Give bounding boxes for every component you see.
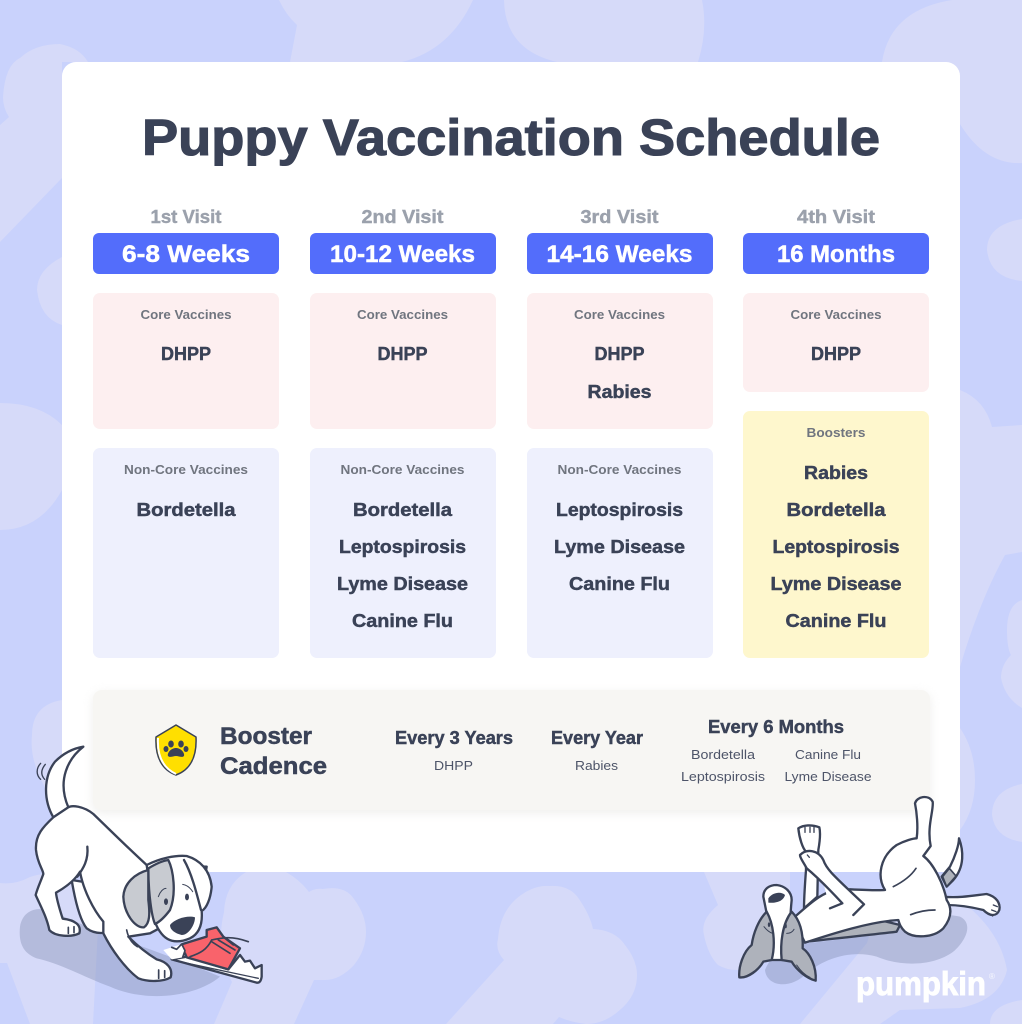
panel: boosters: Lyme Disease	[770, 574, 902, 594]
column: 4th visit: 4th Visit	[797, 207, 875, 227]
panel: core vaccines 2: Core Vaccines	[357, 307, 448, 322]
logo: pumpkin: pumpkin	[856, 965, 986, 1002]
body	[36, 806, 207, 981]
panel: core vaccines 1	[93, 293, 279, 429]
illustration: puppy rolling on back	[739, 797, 1000, 984]
panel: core vaccines 3: Core Vaccines	[574, 307, 665, 322]
panel: core vaccines 3: DHPP	[594, 344, 644, 364]
column: 1st visit: 6-8 Weeks	[122, 241, 250, 268]
head	[763, 885, 792, 960]
panel: non-core vaccines 2: Bordetella	[353, 500, 453, 520]
column: 3rd visit: 3rd Visit	[580, 207, 659, 227]
cadence: every 6 months: Leptospirosis	[681, 769, 766, 784]
tail	[46, 747, 83, 817]
panel: boosters: Canine Flu	[786, 611, 886, 631]
panel: core vaccines 3: Rabies	[588, 382, 652, 402]
panel: non-core vaccines 3	[527, 448, 713, 658]
heading: booster cadence: Booster	[220, 723, 312, 750]
panel: non-core vaccines 1: Bordetella	[136, 500, 237, 520]
panel: core vaccines 2: DHPP	[378, 344, 428, 364]
title: Puppy Vaccination Schedule	[142, 109, 880, 166]
panel: non-core vaccines 1	[93, 448, 279, 658]
cadence: every year: Every Year	[551, 728, 643, 748]
hind leg right	[943, 894, 1000, 915]
lower belly grey	[807, 919, 900, 942]
cadence: every 6 months: Every 6 Months	[708, 717, 844, 737]
panel: boosters: Leptospirosis	[772, 537, 900, 557]
cadence: every year	[551, 728, 643, 773]
panel: boosters	[743, 411, 929, 658]
nose	[170, 917, 195, 935]
panel: non-core vaccines 1: Non-Core Vaccines	[124, 462, 248, 477]
column: 2nd visit: 2nd Visit	[362, 207, 444, 227]
panel: non-core vaccines 2: Canine Flu	[352, 611, 453, 631]
panel: core vaccines 4: DHPP	[811, 344, 861, 364]
tail	[942, 838, 962, 887]
panel: core vaccines 4: Core Vaccines	[790, 307, 882, 322]
shoe	[163, 927, 262, 983]
far front leg	[798, 825, 820, 908]
icon: shield with paw	[156, 725, 196, 775]
hind leg back	[72, 880, 113, 933]
column: 2nd visit: 10-12 Weeks	[330, 241, 475, 268]
cadence: every 6 months: Canine Flu	[795, 747, 861, 762]
heading: booster cadence: Cadence	[220, 753, 327, 780]
panel: non-core vaccines 3: Lyme Disease	[554, 537, 685, 557]
panel: core vaccines 1: DHPP	[161, 344, 211, 364]
body	[795, 797, 950, 943]
heading: booster cadence	[220, 723, 327, 780]
cadence: every 3 years: DHPP	[434, 758, 473, 773]
column: 3rd visit	[527, 207, 713, 658]
panel: core vaccines 2	[310, 293, 496, 429]
column: 4th visit	[743, 207, 929, 658]
panel: boosters: Bordetella	[786, 500, 887, 520]
panel: core vaccines 1: Core Vaccines	[140, 307, 232, 322]
panel: boosters: Rabies	[804, 463, 868, 483]
panel: booster cadence band	[93, 690, 930, 813]
illustration: puppy chewing shoe	[20, 747, 262, 996]
panel: core vaccines 4	[743, 293, 929, 392]
panel: non-core vaccines 2: Lyme Disease	[337, 574, 468, 594]
cadence: every year: Rabies	[575, 758, 619, 773]
panel: non-core vaccines 2: Non-Core Vaccines	[340, 462, 464, 477]
panel: non-core vaccines 3: Leptospirosis	[556, 500, 683, 520]
near front leg	[800, 851, 864, 915]
panel: non-core vaccines 3: Non-Core Vaccines	[558, 462, 682, 477]
logo: pumpkin: ®	[989, 972, 995, 981]
cadence: every 3 years	[395, 728, 513, 773]
cadence: every 6 months	[681, 717, 872, 784]
panel: non-core vaccines 3: Canine Flu	[569, 574, 670, 594]
column: 1st visit	[93, 207, 279, 658]
panel: non-core vaccines 2: Leptospirosis	[339, 537, 466, 557]
ears and face patches	[739, 912, 774, 977]
panel: core vaccines 3	[527, 293, 713, 429]
column: 2nd visit	[310, 207, 496, 658]
white card	[62, 62, 960, 872]
column: 4th visit: 16 Months	[777, 241, 895, 268]
cadence: every 3 years: Every 3 Years	[395, 728, 513, 748]
cadence: every 6 months: Lyme Disease	[784, 769, 872, 784]
panel: boosters: Boosters	[806, 425, 866, 440]
column: 1st visit: 1st Visit	[150, 207, 222, 227]
cadence: every 6 months: Bordetella	[691, 747, 756, 762]
column: 3rd visit: 14-16 Weeks	[546, 241, 692, 268]
head	[147, 856, 212, 941]
panel: non-core vaccines 2	[310, 448, 496, 658]
